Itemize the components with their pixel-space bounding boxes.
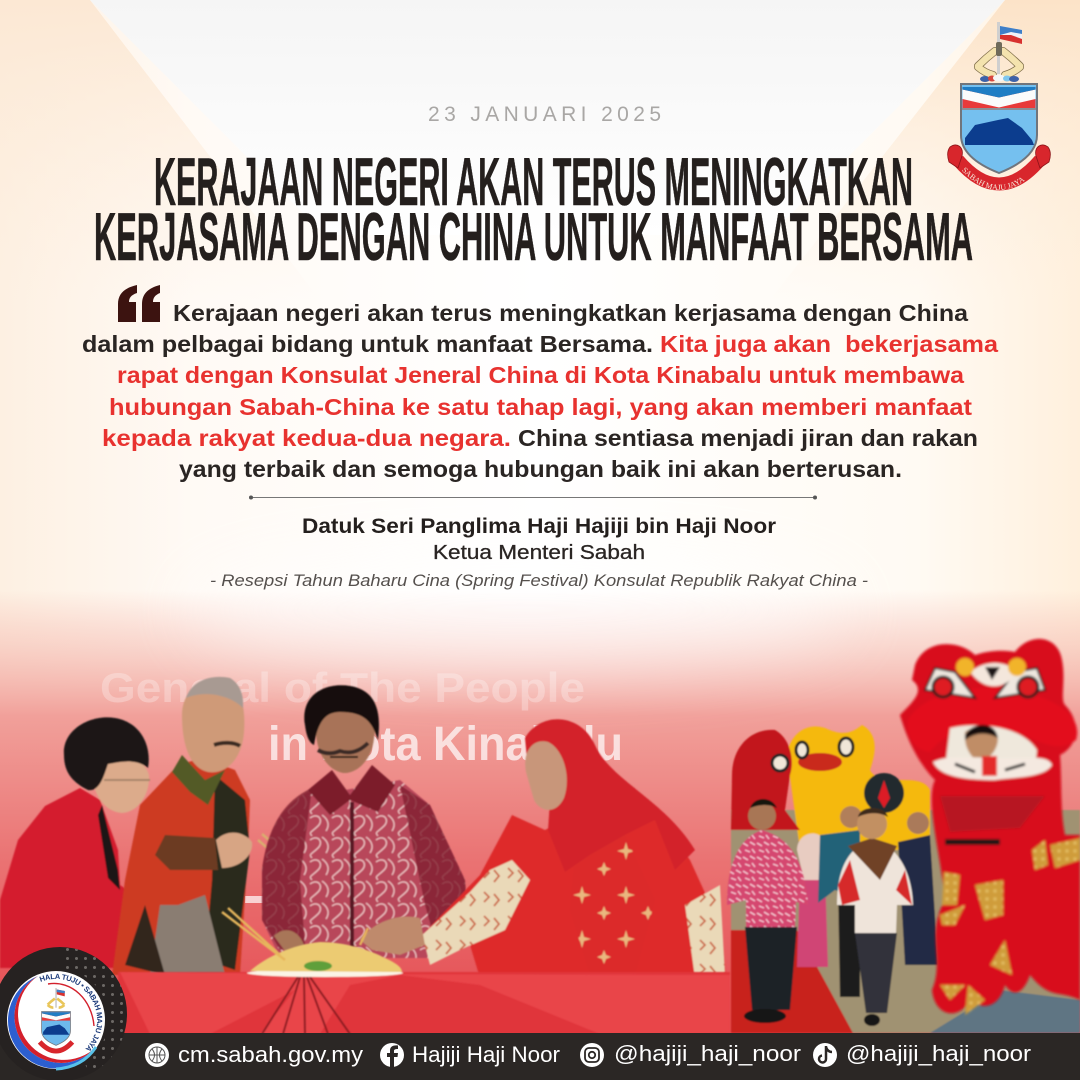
quote text: Kerajaan negeri akan terus meningkatkan kerjasama dengan China	[173, 300, 969, 326]
guest in background suit	[898, 835, 938, 965]
table with red cloth and food plate	[118, 908, 730, 1034]
quote text: hubungan Sabah-China ke satu tahap lagi, yang akan memberi manfaat	[109, 394, 972, 420]
quote text: China sentiasa menjadi jiran dan rakan	[518, 425, 978, 451]
crest: Sabah coat of arms	[947, 22, 1051, 190]
quote text	[82, 300, 999, 482]
man in pink batik	[727, 830, 808, 927]
person: woman in red hijab	[360, 719, 726, 978]
backdrop projected text: General of The People	[100, 664, 585, 711]
badge: Hala Tuju Sabah Maju Jaya	[0, 947, 127, 1070]
instagram handle: @hajiji_haji_noor	[614, 1041, 801, 1066]
quote text: yang terbaik dan semoga hubungan baik ini akan berterusan.	[179, 456, 902, 482]
icon: opening quote marks	[118, 285, 160, 322]
title	[94, 144, 973, 275]
backdrop projected text: in Kota Kinabalu	[268, 718, 623, 771]
background lions	[787, 725, 930, 850]
photo: group backdrop	[0, 555, 1080, 1040]
flag and pole	[997, 22, 1022, 74]
event note: - Resepsi Tahun Baharu Cina (Spring Festival) Konsulat Republik Rakyat China -	[210, 571, 868, 590]
backdrop projected text	[100, 664, 623, 903]
footer bar	[0, 1033, 1080, 1080]
person: man in red and olive shirt	[112, 677, 314, 975]
hands	[978, 42, 1020, 75]
person: woman in red jacket	[0, 717, 222, 968]
divider	[249, 496, 817, 500]
floor and red carpet	[731, 810, 1080, 1033]
small crest	[40, 988, 72, 1051]
person: man in maroon batik	[262, 685, 468, 958]
quote text: rapat dengan Konsulat Jeneral China di Kota Kinabalu untuk membawa	[117, 362, 965, 388]
icon: instagram	[580, 1043, 604, 1067]
speaker name: Datuk Seri Panglima Haji Hajiji bin Haji Noor	[302, 515, 776, 538]
woman guest	[797, 870, 828, 967]
website: cm.sabah.gov.my	[178, 1042, 363, 1067]
motto ribbon: SABAH MAJU JAYA	[962, 168, 1025, 190]
speaker role: Ketua Menteri Sabah	[433, 542, 645, 564]
man in brown and white shirt	[837, 838, 913, 933]
date: 23 JANUARI 2025	[428, 103, 664, 126]
photo: lion dance and walking guests	[727, 725, 1080, 1033]
tiktok handle: @hajiji_haji_noor	[846, 1041, 1031, 1066]
quote text: dalam pelbagai bidang untuk manfaat Bersama.	[82, 331, 653, 357]
beads	[980, 74, 1019, 82]
icon: facebook	[380, 1043, 404, 1067]
quote text: Kita juga akan bekerjasama	[660, 331, 999, 357]
facebook name: Hajiji Haji Noor	[412, 1042, 560, 1067]
shield	[961, 84, 1037, 173]
badge: Hala Tuju Sabah Maju Jaya: HALA TUJU • SABAH MAJU JAYA	[39, 974, 102, 1051]
guest in blue batik	[818, 830, 860, 903]
gold panels	[940, 838, 1080, 925]
icon: tiktok	[813, 1043, 837, 1067]
icon: globe	[145, 1043, 169, 1067]
motto ribbon	[947, 144, 1051, 190]
quote text: kepada rakyat kedua-dua negara.	[102, 425, 511, 451]
main red lion	[900, 639, 1080, 1015]
lion face	[925, 668, 1045, 698]
footer links	[145, 1041, 1031, 1067]
